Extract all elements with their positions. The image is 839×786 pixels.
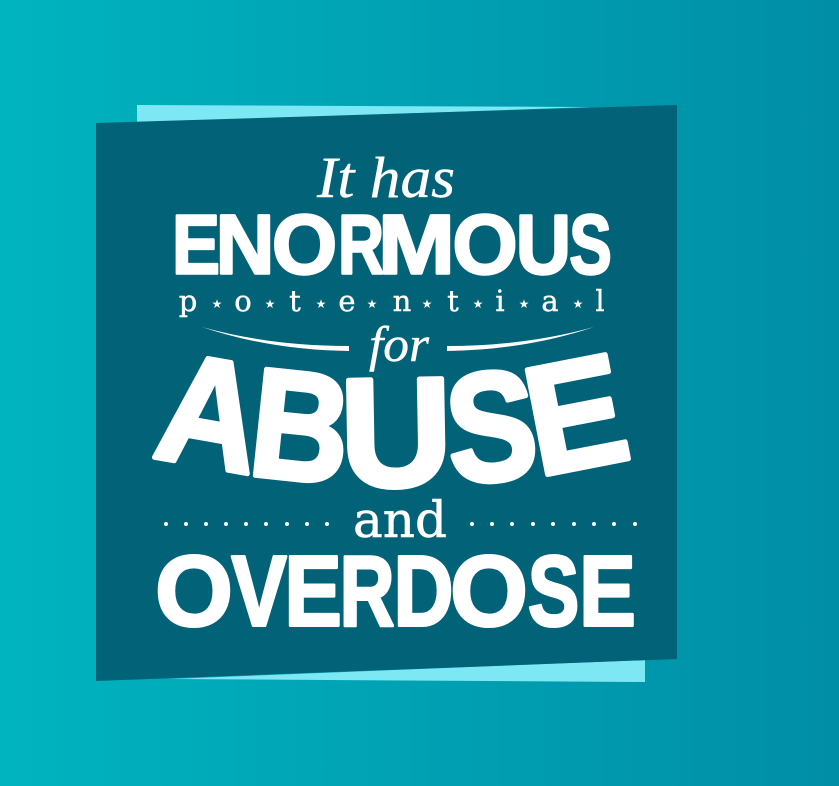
spaced line: potential: o — [234, 284, 252, 318]
heading: ENORMOUS: S — [569, 197, 612, 292]
heading: ENORMOUS — [172, 197, 612, 293]
heading: ENORMOUS: U — [516, 198, 571, 293]
heading: ENORMOUS: M — [378, 198, 455, 292]
spaced line: potential: t — [289, 284, 301, 318]
dotted rule: left — [164, 522, 329, 526]
accent sheet: top — [137, 105, 590, 123]
spaced line: potential: ★ — [473, 297, 483, 311]
heading: ABUSE: S — [439, 336, 544, 517]
swash: left — [202, 327, 349, 351]
heading: OVERDOSE: E — [579, 535, 636, 647]
heading: ENORMOUS: O — [452, 198, 518, 292]
heading: ABUSE: E — [511, 321, 641, 510]
spaced line: potential: n — [393, 284, 411, 318]
spaced line: potential: ★ — [367, 297, 377, 311]
heading: ABUSE: B — [243, 335, 359, 517]
accent sheet: bottom — [170, 660, 645, 682]
swash: right — [447, 327, 594, 351]
heading: ABUSE — [145, 320, 641, 520]
spaced line: potential: l — [595, 284, 605, 318]
heading: ENORMOUS: O — [272, 198, 337, 292]
heading: ENORMOUS: N — [216, 198, 274, 292]
spaced line: potential: ★ — [316, 297, 326, 311]
spaced line: potential: t — [447, 284, 459, 318]
spaced line: potential: ★ — [265, 297, 275, 311]
spaced line: potential: i — [495, 284, 505, 318]
spaced line: potential: ★ — [573, 297, 583, 311]
panel: main card — [96, 105, 677, 681]
spaced line: potential: ★ — [212, 297, 222, 311]
heading: ENORMOUS: E — [172, 198, 220, 292]
heading: ENORMOUS: R — [338, 197, 384, 292]
script line: It has: It has — [316, 145, 455, 210]
heading: OVERDOSE: D — [394, 536, 453, 647]
heading: OVERDOSE: O — [155, 536, 233, 648]
heading: OVERDOSE: S — [528, 535, 579, 647]
spaced line: potential: a — [541, 284, 559, 318]
heading: OVERDOSE — [155, 535, 636, 648]
dotted rule: right — [470, 522, 637, 526]
script line: for: for — [369, 316, 430, 372]
heading: ABUSE: U — [339, 345, 454, 520]
heading: OVERDOSE: O — [450, 536, 528, 648]
heading: OVERDOSE: V — [231, 536, 287, 647]
heading: OVERDOSE: R — [340, 535, 394, 647]
spaced line: potential: ★ — [422, 297, 432, 311]
heading: ABUSE: A — [145, 320, 275, 507]
spaced line: potential: p — [179, 284, 197, 318]
spaced line: potential: ★ — [519, 297, 529, 311]
spaced line: potential: e — [338, 284, 356, 318]
spaced line: potential — [179, 284, 605, 318]
heading: OVERDOSE: E — [284, 535, 342, 647]
connector word: and: and — [353, 491, 447, 549]
